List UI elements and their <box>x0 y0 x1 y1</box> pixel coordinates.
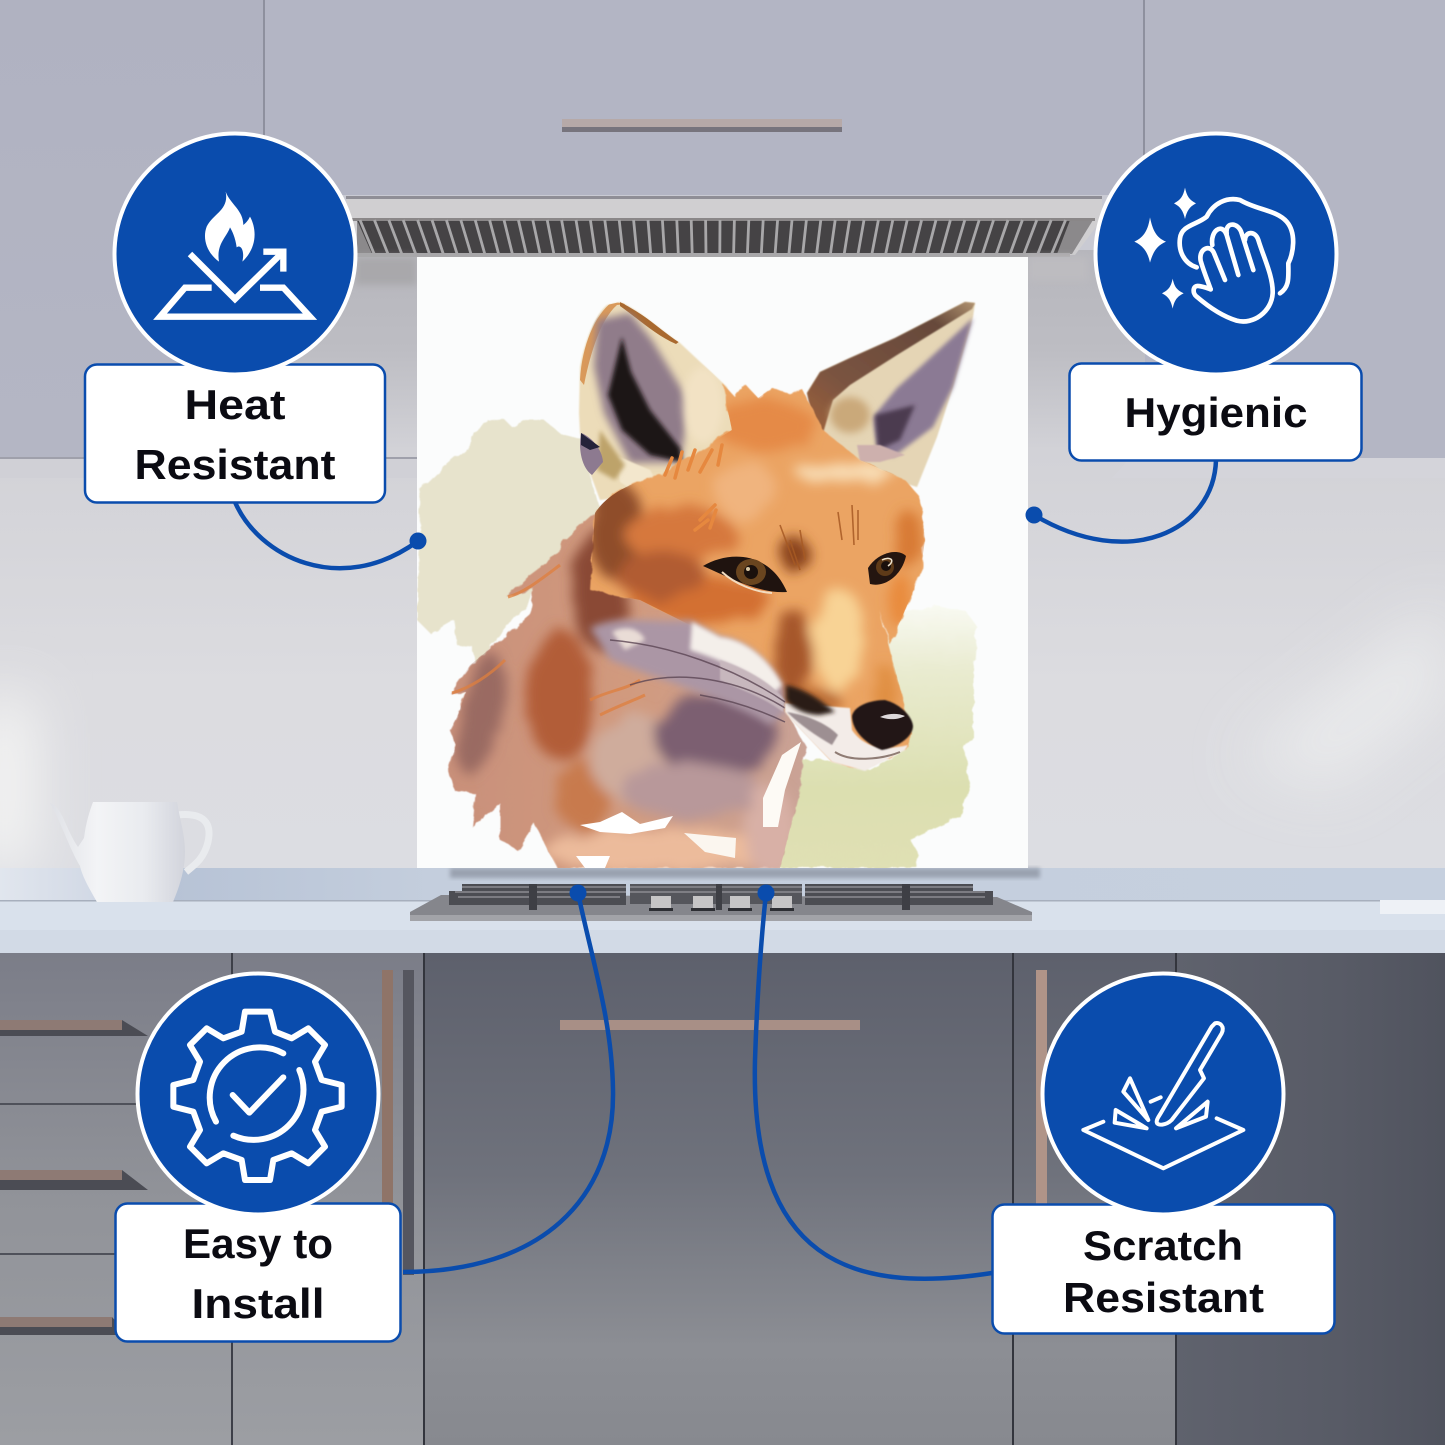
top handle <box>562 119 842 128</box>
cooker hood <box>346 197 1102 255</box>
cabinet shelf edges <box>0 458 417 478</box>
eyes <box>703 552 906 593</box>
ruff and cheek <box>590 620 785 725</box>
right ear <box>807 302 975 487</box>
label box <box>116 1204 400 1342</box>
wall <box>0 250 1445 875</box>
orange fur tufts <box>665 445 722 530</box>
callout: easy to install <box>116 974 400 1342</box>
label text: Heat <box>184 381 286 428</box>
head shading <box>587 399 922 715</box>
icon: knife scratching surface <box>1083 1023 1243 1168</box>
label text line 2: Resistant <box>1063 1274 1264 1321</box>
body shading <box>450 530 801 875</box>
icon: hand wiping with sparkles <box>1134 188 1293 321</box>
label box <box>992 1204 1334 1334</box>
label text: Easy to <box>183 1220 333 1267</box>
ear lobe <box>580 433 603 475</box>
label text: Scratch <box>1083 1222 1243 1269</box>
fox head <box>590 383 925 770</box>
label text: Hygienic <box>1124 389 1308 436</box>
icon: flame on surface <box>160 192 310 317</box>
body highlights <box>580 812 673 834</box>
badge <box>1096 134 1336 374</box>
jug <box>50 802 209 902</box>
callout: scratch resistant <box>992 974 1334 1334</box>
label box <box>1070 364 1362 460</box>
callout: hygienic <box>1070 134 1362 460</box>
muzzle and nose <box>785 685 913 771</box>
fur strokes <box>780 505 858 570</box>
label text line 2: Resistant <box>134 441 336 488</box>
left ear <box>579 302 738 500</box>
gas hob <box>410 884 1032 921</box>
watercolour wash <box>417 418 977 868</box>
connector: heat resistant <box>235 502 426 568</box>
whisker strokes <box>610 640 785 722</box>
fox body <box>449 513 805 868</box>
badge <box>138 974 378 1214</box>
label box <box>85 364 385 502</box>
connector: scratch resistant <box>755 884 992 1279</box>
body orange streaks <box>452 565 645 715</box>
upper cabinets <box>0 0 264 458</box>
connector: easy to install <box>403 884 613 1272</box>
lower cabinets <box>0 953 231 1445</box>
badge <box>1042 974 1284 1214</box>
connector: hygienic <box>1026 460 1216 542</box>
panel: fox watercolour splashback <box>417 257 1028 875</box>
icon: gear with check mark <box>173 1012 342 1180</box>
label text line 2: Install <box>192 1280 324 1327</box>
callout: heat resistant <box>85 134 385 502</box>
lower handles <box>560 1020 860 1030</box>
badge <box>114 134 356 374</box>
counter <box>0 868 1445 901</box>
